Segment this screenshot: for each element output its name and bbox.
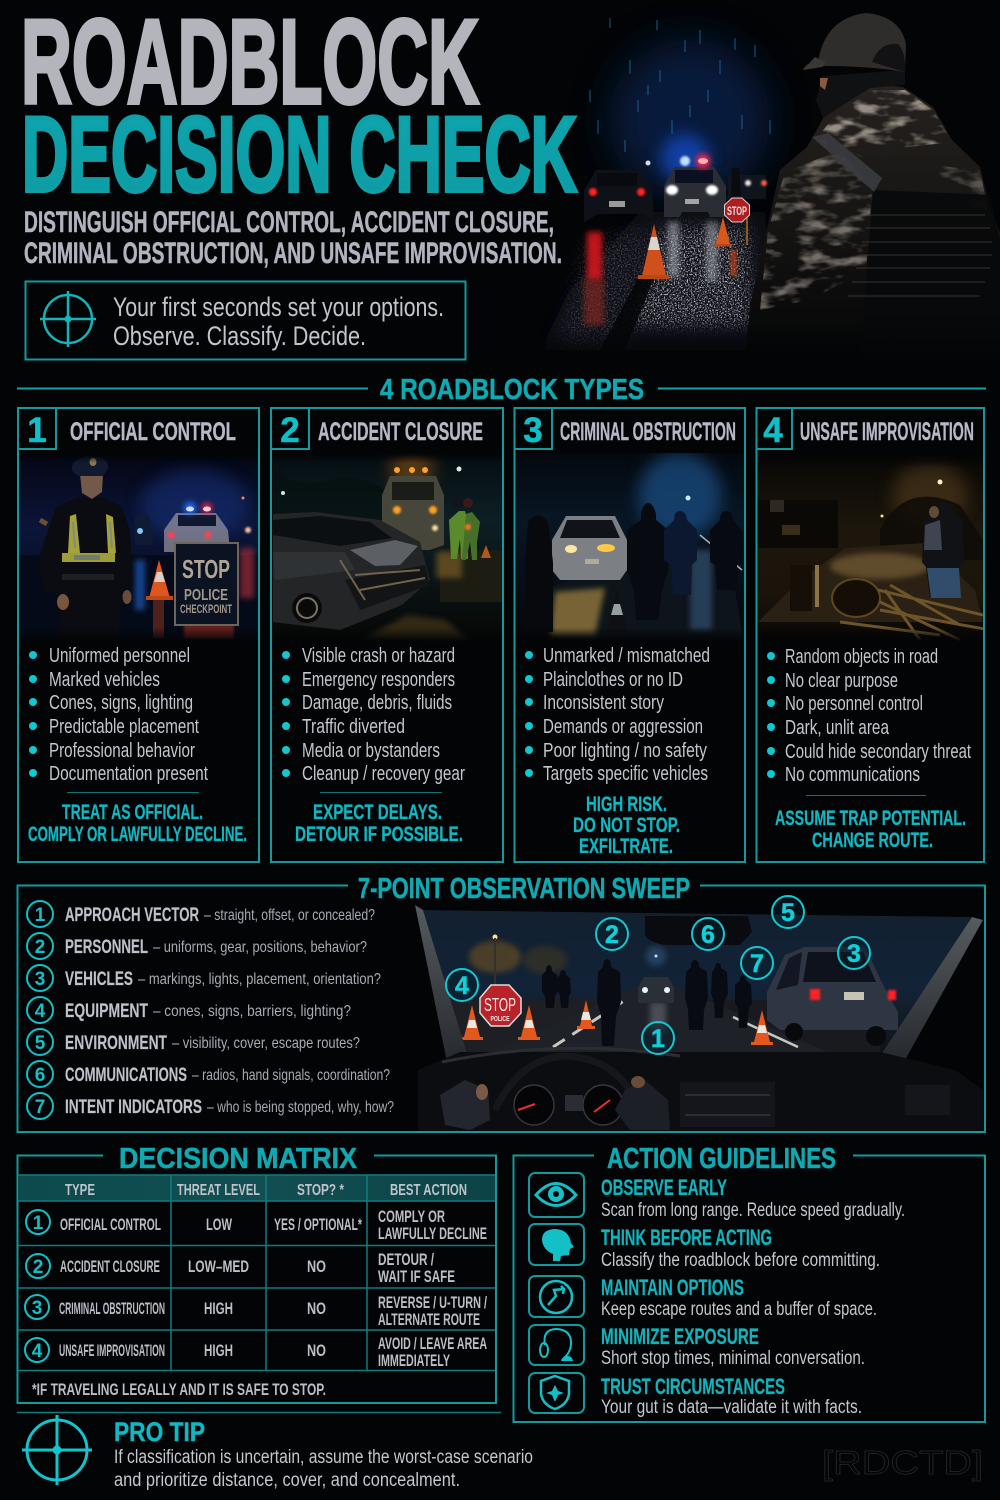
pro tip: PRO TIP: [114, 1417, 205, 1447]
icon: crosshair: [22, 1415, 92, 1485]
row: unsafe improvisation: IMMEDIATELY: [378, 1351, 450, 1370]
dark car left: [584, 170, 654, 222]
police car: [664, 167, 726, 217]
row: unsafe improvisation: [25, 1334, 487, 1370]
feature list: Unmarked / mismatched: [543, 645, 710, 667]
feature list: [29, 645, 208, 785]
verdict: [295, 801, 463, 846]
feature list: [767, 646, 971, 786]
guideline: maintain options: [529, 1275, 877, 1320]
row: criminal obstruction: HIGH: [204, 1299, 233, 1318]
observation checklist: 1: [35, 905, 46, 926]
subtitle: CRIMINAL OBSTRUCTION, AND UNSAFE IMPROVISATION.: [24, 237, 562, 270]
feature list: No communications: [785, 764, 920, 786]
feature list: Plainclothes or no ID: [543, 669, 683, 691]
feature list: Predictable placement: [49, 716, 199, 738]
panel: unsafe improvisation: [756, 408, 990, 862]
section heading: 4 roadblock types: 4 ROADBLOCK TYPES: [380, 374, 644, 406]
row: accident closure: LOW–MED: [188, 1257, 249, 1276]
pro tip: and prioritize distance, cover, and concealment.: [114, 1470, 460, 1491]
feature list: Inconsistent story: [543, 692, 664, 714]
feature list: Damage, debris, fluids: [302, 692, 452, 714]
people: [542, 959, 752, 1046]
panel: accident closure: 2: [280, 411, 300, 450]
panel: official control: OFFICIAL CONTROL: [70, 418, 236, 446]
observation checklist: – cones, signs, barriers, lighting?: [153, 1003, 351, 1020]
table header: STOP? *: [297, 1182, 345, 1199]
guideline: observe early: [529, 1173, 905, 1221]
row: official control: YES / OPTIONAL*: [274, 1215, 362, 1234]
observation checklist: 7: [35, 1097, 45, 1118]
table header: THREAT LEVEL: [177, 1182, 260, 1199]
wrecked car: [273, 512, 430, 630]
verdict: EXFILTRATE.: [579, 835, 673, 858]
numbered scene markers: 2: [605, 921, 619, 949]
numbered scene markers: 5: [781, 899, 795, 927]
illustration: hooded men blocking road: [516, 453, 744, 642]
row: criminal obstruction: CRIMINAL OBSTRUCTION: [59, 1299, 165, 1318]
row: unsafe improvisation: HIGH: [204, 1341, 233, 1360]
verdict: TREAT AS OFFICIAL.: [62, 801, 203, 824]
feature list: Visible crash or hazard: [302, 645, 455, 667]
panel: criminal obstruction: [514, 408, 745, 862]
feature list: [525, 645, 710, 785]
observation checklist: – uniforms, gear, positions, behavior?: [153, 939, 367, 956]
row: accident closure: NO: [307, 1257, 326, 1276]
cones: [642, 224, 666, 276]
subtitle: [24, 206, 562, 270]
row: accident closure: ACCIDENT CLOSURE: [60, 1257, 160, 1276]
subtitle: DISTINGUISH OFFICIAL CONTROL, ACCIDENT CLOSURE,: [24, 206, 554, 239]
windshield scene: STOP: [484, 995, 516, 1015]
row: unsafe improvisation: UNSAFE IMPROVISATION: [59, 1341, 165, 1360]
numbered scene markers: 7: [750, 950, 764, 978]
feature list: Poor lighting / no safety: [543, 740, 707, 762]
panel: official control: 1: [27, 411, 47, 450]
panel: unsafe improvisation: 4: [763, 411, 783, 450]
row: official control: OFFICIAL CONTROL: [60, 1215, 161, 1234]
numbered scene markers: 6: [701, 921, 715, 949]
observation checklist: VEHICLES: [65, 969, 133, 990]
illustration: police officer at checkpoint: POLICE: [184, 587, 228, 604]
verdict: COMPLY OR LAWFULLY DECLINE.: [28, 823, 247, 846]
title: decision check: DECISION CHECK: [22, 94, 577, 214]
feature list: No personnel control: [785, 693, 923, 715]
row: official control: LOW: [206, 1215, 233, 1234]
verdict: CHANGE ROUTE.: [812, 829, 933, 852]
row: official control: COMPLY OR: [378, 1207, 445, 1226]
illustration: police officer at checkpoint: CHECKPOINT: [180, 602, 232, 616]
panel: decision matrix: [18, 1143, 496, 1403]
row: unsafe improvisation: AVOID / LEAVE AREA: [378, 1334, 487, 1353]
guideline: minimize exposure: MINIMIZE EXPOSURE: [601, 1324, 759, 1349]
guideline: minimize exposure: Short stop times, minimal conversation.: [601, 1348, 865, 1369]
far car lights: [728, 175, 766, 199]
guideline: trust circumstances: [529, 1373, 862, 1418]
pro tip: If classification is uncertain, assume the worst-case scenario: [114, 1447, 533, 1468]
observation checklist: 6: [35, 1065, 45, 1086]
observation checklist: APPROACH VECTOR: [65, 905, 199, 926]
observation checklist: – straight, offset, or concealed?: [204, 907, 375, 924]
feature list: Marked vehicles: [49, 669, 160, 691]
hero scene: night roadblock with figure: [548, 13, 1000, 350]
feature list: No clear purpose: [785, 670, 898, 692]
verdict: EXPECT DELAYS.: [313, 801, 442, 824]
callout: first seconds: [26, 282, 466, 360]
observation checklist: – who is being stopped, why, how?: [207, 1099, 394, 1116]
guideline: trust circumstances: Your gut is data—validate it with facts.: [601, 1397, 862, 1418]
row: accident closure: 2: [33, 1257, 43, 1278]
numbered scene markers: 1: [651, 1025, 665, 1053]
observation checklist: 5: [35, 1033, 46, 1054]
cones and stop sign: [461, 1000, 773, 1045]
observation checklist: [27, 901, 394, 1119]
callout: first seconds: Your first seconds set your options.: [113, 292, 444, 322]
feature list: Professional behavior: [49, 740, 195, 762]
numbered scene markers: [446, 896, 870, 1054]
guideline: maintain options: Keep escape routes and a buffer of space.: [601, 1299, 877, 1320]
verdict: DO NOT STOP.: [573, 814, 680, 837]
windshield scene: [415, 905, 983, 1131]
feature list: [282, 645, 465, 785]
observation checklist: 3: [35, 969, 45, 990]
illustration: police officer at checkpoint: [19, 453, 258, 642]
feature list: Targets specific vehicles: [543, 763, 708, 785]
heading: 7-POINT OBSERVATION SWEEP: [358, 873, 690, 905]
observation checklist: ENVIRONMENT: [65, 1033, 167, 1054]
illustration: police officer at checkpoint: STOP: [182, 554, 230, 584]
observation checklist: 4: [35, 1001, 46, 1022]
pro tip: [22, 1415, 533, 1491]
guideline: think before acting: [529, 1224, 880, 1271]
row: criminal obstruction: NO: [307, 1299, 326, 1318]
table header: [18, 1175, 495, 1201]
observation checklist: – visibility, cover, escape routes?: [172, 1035, 360, 1052]
numbered scene markers: 3: [847, 940, 861, 968]
guideline: minimize exposure: [529, 1324, 865, 1369]
feature list: Random objects in road: [785, 646, 938, 668]
hero scene: night roadblock with figure: STOP: [727, 204, 747, 218]
dashboard: [418, 1052, 983, 1131]
row: official control: 1: [33, 1213, 44, 1234]
verdict: [573, 793, 680, 858]
observation checklist: 2: [35, 937, 45, 958]
row: official control: LAWFULLY DECLINE: [378, 1224, 487, 1243]
guideline: observe early: Scan from long range. Reduce speed gradually.: [601, 1200, 905, 1221]
panel: action guidelines: [514, 1143, 985, 1422]
feature list: Dark, unlit area: [785, 717, 890, 739]
feature list: Demands or aggression: [543, 716, 703, 738]
windshield scene: POLICE: [490, 1016, 510, 1023]
watermark: [RDCTD]: [822, 1444, 983, 1481]
row: official control: [26, 1207, 487, 1243]
table header: BEST ACTION: [390, 1182, 467, 1199]
illustration: debris in dark road: [758, 453, 990, 642]
jacket folds: [822, 90, 947, 157]
panel: criminal obstruction: 3: [523, 411, 543, 450]
vest: [868, 190, 1000, 262]
row: criminal obstruction: [25, 1293, 487, 1329]
guideline: maintain options: MAINTAIN OPTIONS: [601, 1275, 744, 1300]
observation checklist: COMMUNICATIONS: [65, 1065, 187, 1086]
verdict: [775, 807, 966, 852]
verdict: [28, 801, 247, 846]
numbered scene markers: 4: [455, 972, 469, 1000]
observation checklist: INTENT INDICATORS: [65, 1097, 202, 1118]
guideline: trust circumstances: TRUST CIRCUMSTANCES: [601, 1374, 785, 1399]
row: criminal obstruction: 3: [32, 1298, 42, 1319]
heading: ACTION GUIDELINES: [607, 1143, 836, 1175]
feature list: Traffic diverted: [302, 716, 405, 738]
illustration: crash and tow truck: [273, 448, 502, 642]
verdict: HIGH RISK.: [586, 793, 667, 816]
row: accident closure: WAIT IF SAFE: [378, 1267, 455, 1286]
row: accident closure: DETOUR /: [378, 1250, 434, 1269]
guideline: think before acting: THINK BEFORE ACTING: [601, 1225, 772, 1250]
verdict: DETOUR IF POSSIBLE.: [295, 823, 463, 846]
row: criminal obstruction: ALTERNATE ROUTE: [378, 1310, 480, 1329]
figure: [745, 84, 1000, 365]
row: criminal obstruction: REVERSE / U-TURN /: [378, 1293, 487, 1312]
observation checklist: – markings, lights, placement, orientation?: [138, 971, 381, 988]
panel: accident closure: [271, 408, 503, 862]
stop sign: [746, 217, 748, 245]
feature list: Uniformed personnel: [49, 645, 190, 667]
footnote: *IF TRAVELING LEGALLY AND IT IS SAFE TO STOP.: [32, 1380, 326, 1399]
observation checklist: PERSONNEL: [65, 937, 148, 958]
officer: [40, 497, 133, 586]
panel: criminal obstruction: CRIMINAL OBSTRUCTION: [560, 418, 736, 446]
row: unsafe improvisation: 4: [32, 1341, 43, 1362]
SUV: [767, 947, 898, 1030]
feature list: Media or bystanders: [302, 740, 440, 762]
callout: first seconds: Observe. Classify. Decide.: [113, 321, 366, 351]
guideline: observe early: OBSERVE EARLY: [601, 1175, 727, 1200]
guideline: think before acting: Classify the roadblock before committing.: [601, 1250, 880, 1271]
panel: 7-point observation sweep: [18, 873, 985, 1132]
mirror: [645, 916, 752, 945]
feature list: Cones, signs, lighting: [49, 692, 193, 714]
panel: official control: [18, 408, 259, 862]
row: accident closure: [26, 1250, 455, 1286]
rain: [590, 18, 770, 152]
heading: DECISION MATRIX: [119, 1143, 358, 1175]
observation checklist: EQUIPMENT: [65, 1001, 148, 1022]
observation checklist: – radios, hand signals, coordination?: [192, 1067, 390, 1084]
feature list: Emergency responders: [302, 669, 455, 691]
table header: TYPE: [65, 1182, 95, 1199]
row: unsafe improvisation: NO: [307, 1341, 326, 1360]
feature list: Cleanup / recovery gear: [302, 763, 465, 785]
panel: accident closure: ACCIDENT CLOSURE: [318, 418, 483, 446]
sign: [175, 543, 238, 625]
feature list: Documentation present: [49, 763, 208, 785]
